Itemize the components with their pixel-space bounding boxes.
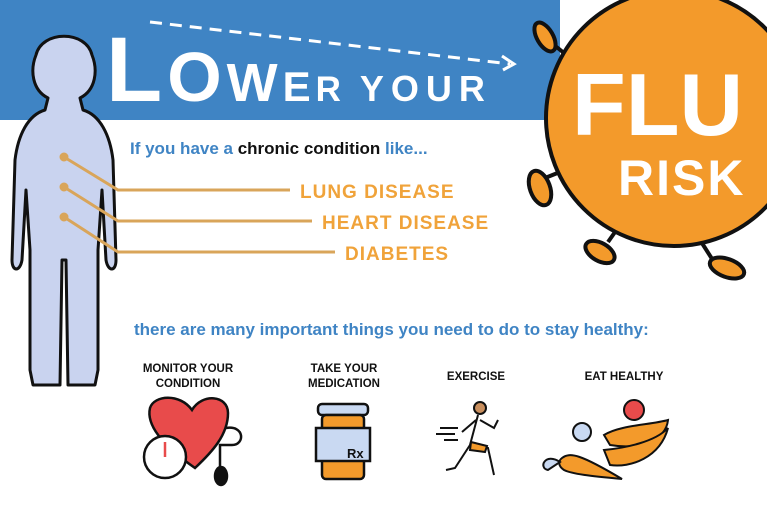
labels row: MEDICATION	[308, 378, 380, 390]
risk text: RISK	[618, 150, 745, 206]
person silhouette	[12, 36, 116, 385]
icon: medication bottle	[316, 404, 370, 479]
icon: medication bottle: Rx	[347, 446, 364, 461]
dashed arrow	[150, 22, 514, 70]
virus: flu risk	[524, 0, 767, 283]
conditions list: DIABETES	[345, 244, 449, 265]
icon: healthy food	[543, 400, 668, 479]
labels row: MONITOR YOUR	[143, 363, 234, 375]
icon: heart monitor	[144, 398, 241, 485]
subheading: there are many important things you need to do to stay healthy:	[134, 320, 649, 339]
flu text: FLU	[572, 55, 743, 154]
conditions list: LUNG DISEASE	[300, 182, 455, 203]
conditions list: HEART DISEASE	[322, 213, 489, 234]
icon: runner	[436, 402, 498, 475]
intro sentence: If you have a chronic condition like...	[130, 139, 428, 158]
labels row	[143, 363, 664, 390]
conditions list	[300, 182, 489, 265]
title: lower your: LOWER YOUR	[106, 19, 492, 121]
condition connector lines	[61, 154, 335, 252]
labels row: TAKE YOUR	[311, 363, 378, 375]
labels row: CONDITION	[156, 378, 220, 390]
labels row: EAT HEALTHY	[585, 371, 664, 383]
blue header band	[0, 0, 560, 120]
labels row: EXERCISE	[447, 371, 505, 383]
